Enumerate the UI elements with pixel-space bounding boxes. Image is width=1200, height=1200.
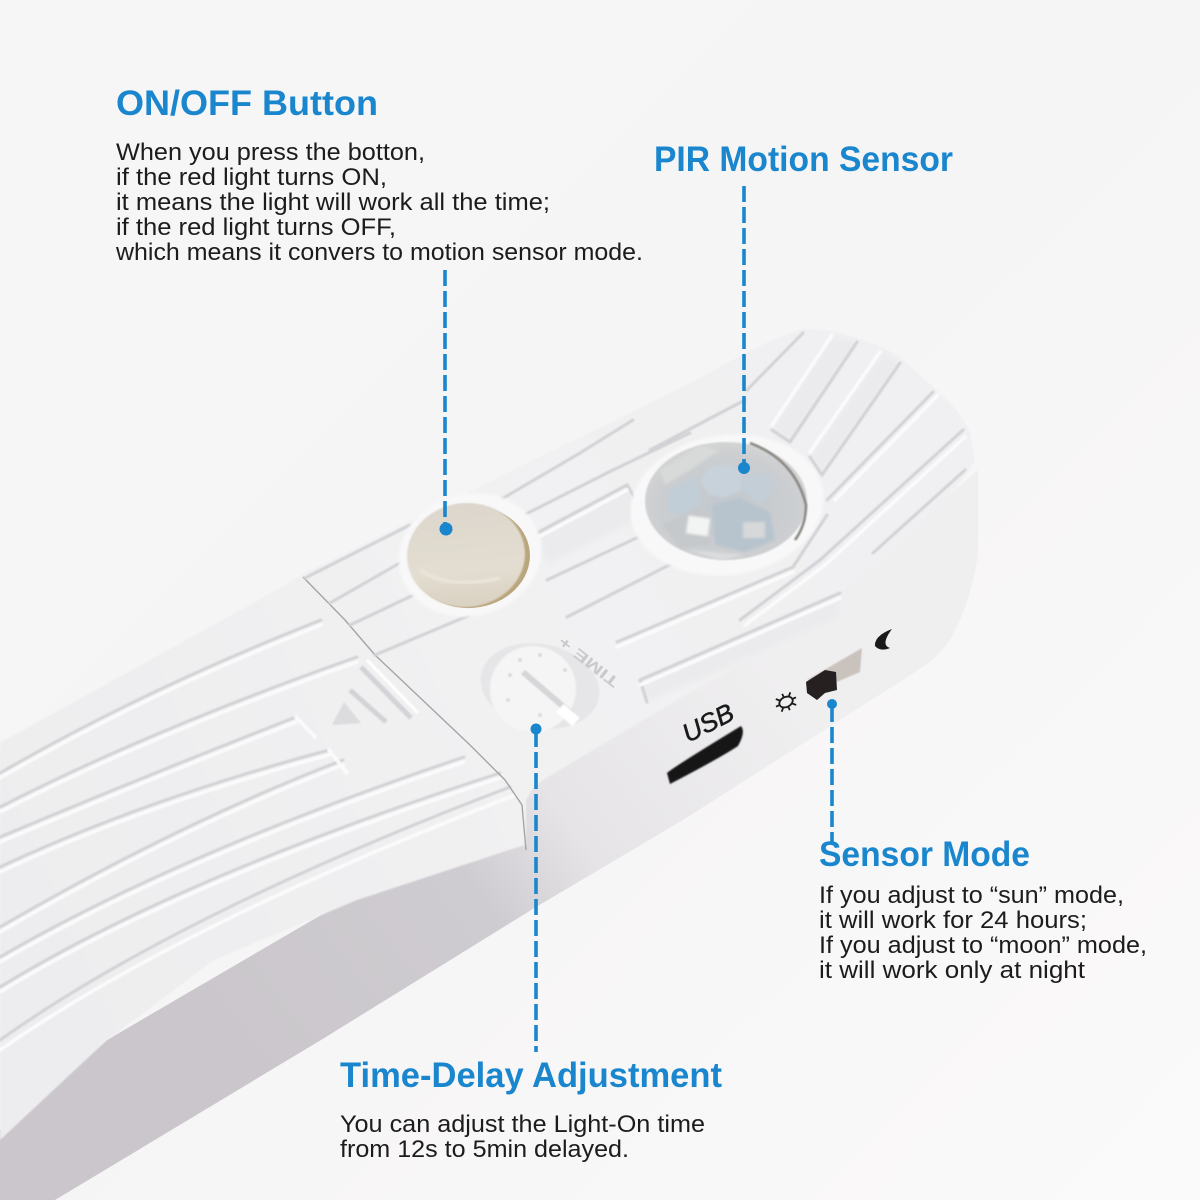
head ridges (305, 333, 965, 702)
PIR sensor dome (621, 422, 833, 588)
housing side face (0, 470, 978, 1200)
description: which means it convers to motion sensor mode. (115, 239, 643, 266)
description: if the red light turns ON, (116, 164, 387, 191)
embossed TIME label: TIME + (555, 632, 622, 690)
callout: Sensor Mode (819, 699, 1147, 984)
USB label: USB (677, 697, 739, 748)
slide switch (806, 648, 862, 700)
time dial (473, 632, 607, 740)
description: it will work for 24 hours; (819, 907, 1087, 934)
description (115, 139, 643, 266)
housing top face (0, 329, 975, 1140)
heading: ON/OFF Button (116, 84, 378, 123)
description: You can adjust the Light-On time (340, 1111, 705, 1138)
product: motion sensor light housing (0, 329, 978, 1200)
leader line (738, 186, 750, 474)
description: When you press the botton, (116, 139, 425, 166)
heading: PIR Motion Sensor (654, 140, 953, 179)
description: from 12s to 5min delayed. (340, 1136, 629, 1163)
moon icon (875, 629, 892, 650)
heading: Time-Delay Adjustment (340, 1056, 722, 1095)
joint seam (303, 577, 526, 850)
description: it means the light will work all the time; (116, 189, 550, 216)
description (819, 882, 1147, 984)
body ridges, left section (0, 620, 515, 1050)
leader line (530, 724, 542, 1052)
sun icon (772, 689, 800, 715)
description: If you adjust to “sun” mode, (819, 882, 1124, 909)
callout: PIR Motion Sensor (654, 140, 953, 474)
leader line (440, 270, 452, 536)
description: it will work only at night (819, 957, 1085, 984)
slide arrow mark (332, 660, 418, 725)
description (340, 1111, 705, 1163)
callout: ON/OFF Button (115, 84, 643, 536)
callout: Time-Delay Adjustment (340, 724, 722, 1163)
description: if the red light turns OFF, (116, 214, 396, 241)
on/off button (385, 477, 555, 633)
description: If you adjust to “moon” mode, (819, 932, 1147, 959)
heading: Sensor Mode (819, 835, 1030, 874)
USB port (667, 726, 743, 784)
head recessed bands (537, 337, 900, 702)
leader line (827, 699, 837, 842)
